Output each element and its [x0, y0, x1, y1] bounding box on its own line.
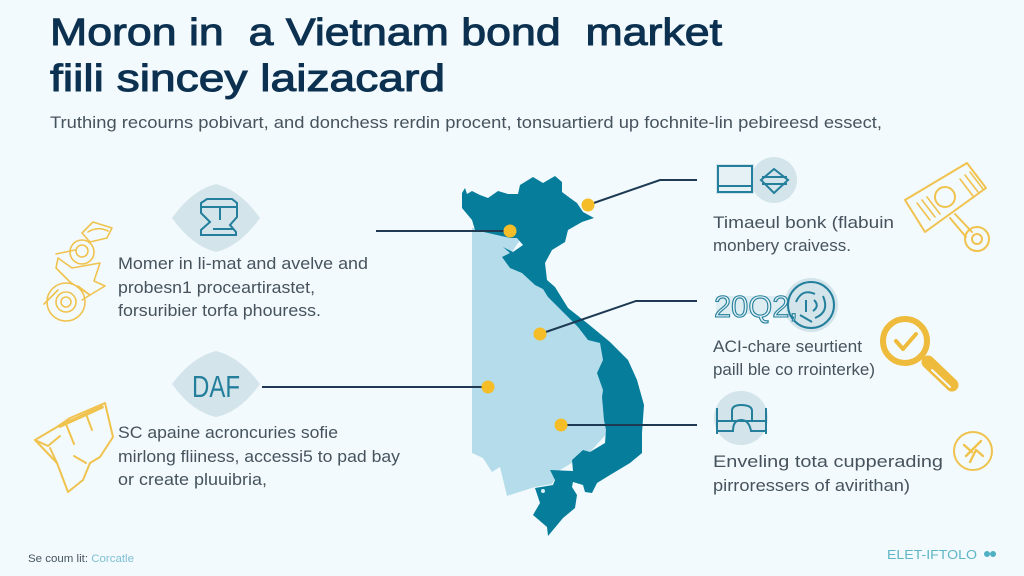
map: dark coastal region	[462, 176, 644, 536]
right item 1 gold icon	[905, 163, 989, 251]
left item 1 text: Momer in li-mat and avelve and	[118, 254, 368, 273]
right item 2 icon: 20Q2,	[714, 289, 798, 324]
footer brand: ELET-IFTOLO	[887, 547, 977, 562]
footer source: Se coum lit: Corcatle	[28, 553, 134, 565]
right item 1 icon	[716, 157, 797, 203]
left item 1 gold icon	[44, 222, 112, 321]
right item 3 icon	[714, 391, 768, 445]
left item 1 text	[118, 254, 368, 320]
right item 1 text: monbery craivess.	[713, 236, 851, 255]
right item 3 text: Enveling tota cupperading	[713, 452, 943, 471]
right item 2 text	[713, 337, 875, 379]
left item 2 text: or create pluuibria,	[118, 470, 267, 489]
right item 2 text: ACI-chare seurtient	[713, 337, 862, 356]
right item 1 text: Timaeul bonk (flabuin	[713, 213, 894, 232]
right item 3 text: pirroressers of avirithan)	[713, 476, 910, 495]
map markers	[482, 198, 594, 432]
left item 2 icon badge	[172, 351, 260, 417]
map of Vietnam	[462, 176, 644, 536]
title	[50, 12, 723, 100]
title: Moron in a Vietnam bond market	[50, 12, 723, 54]
left item 1 icon badge	[172, 184, 260, 252]
right item 2 gold magnifier icon	[883, 319, 952, 387]
left item 1 text: forsuribier torfa phouress.	[118, 301, 321, 320]
connector lines	[262, 180, 697, 425]
right item 3 gold icon	[954, 432, 992, 470]
left item 1 text: probesn1 proceartirastet,	[118, 278, 315, 297]
left item 2 gold icon	[35, 403, 113, 492]
left item 2 text: SC apaine acroncuries sofie	[118, 423, 338, 442]
left item 2 text: mirlong fliiness, accessi5 to pad bay	[118, 447, 401, 466]
right item 3 text	[713, 452, 943, 495]
right item 2 text: paill ble co rrointerke)	[713, 360, 875, 379]
title: fiili sincey laizacard	[50, 58, 445, 100]
left item 2 text	[118, 423, 401, 489]
map: light inland region	[472, 228, 610, 496]
right item 1 text	[713, 213, 894, 255]
subtitle: Truthing recourns pobivart, and donchess rerdin procent, tonsuartierd up fochnite-lin pebireesd essect,	[50, 114, 882, 132]
right item 2 icon	[714, 278, 838, 332]
left item 2 icon badge: DAF	[192, 369, 240, 404]
